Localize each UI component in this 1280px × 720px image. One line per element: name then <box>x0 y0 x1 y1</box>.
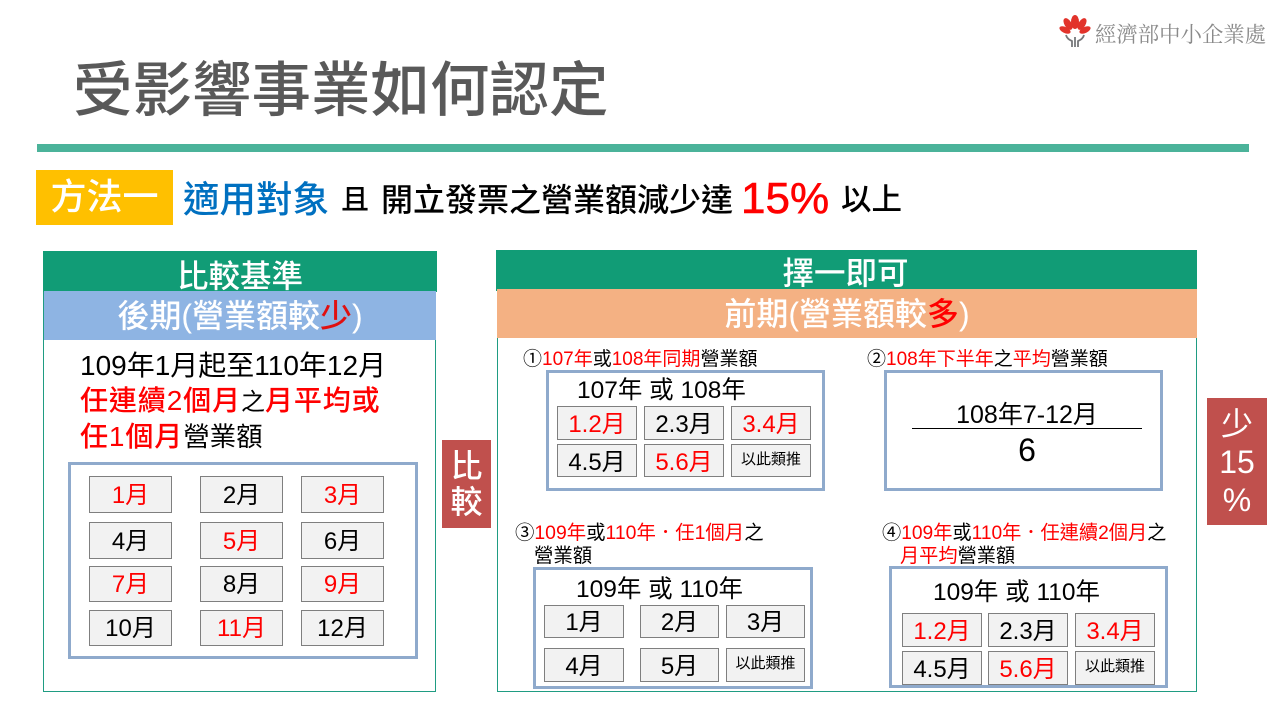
cell <box>557 444 637 477</box>
month cell: 7月: 7月 <box>112 571 149 598</box>
month cell: 1月 <box>89 476 172 513</box>
cell: 以此類推 <box>741 451 801 468</box>
title rule <box>37 144 1249 152</box>
panel header: 比較基準 <box>177 258 303 294</box>
cell <box>1075 651 1155 685</box>
cell <box>988 613 1068 647</box>
month cell: 6月 <box>301 522 384 559</box>
cell: 4.5月 <box>568 449 626 476</box>
agency name: 經濟部中小企業處 <box>1095 23 1266 47</box>
cell: 4月 <box>565 653 603 680</box>
cell <box>988 651 1068 685</box>
month cell: 11月: 11月 <box>217 615 266 642</box>
month cell: 7月 <box>89 566 172 602</box>
option 3 heading: ③109年或110年．任1個月之 <box>515 522 764 544</box>
icon: emblem <box>1059 15 1091 47</box>
month cell: 12月: 12月 <box>317 615 368 642</box>
less 15% label: 15 <box>1219 444 1255 480</box>
cell: 5.6月 <box>999 656 1057 683</box>
month cell: 3月: 3月 <box>324 482 361 509</box>
month cell: 10月 <box>89 610 172 646</box>
month cell: 10月: 10月 <box>105 615 156 642</box>
cell: 5.6月 <box>655 449 713 476</box>
option 1 box <box>546 370 825 491</box>
compare label: 較 <box>450 484 482 520</box>
compare label <box>442 440 491 528</box>
sales decline phrase: 開立發票之營業額減少達 <box>381 182 733 218</box>
description text: 任1個月營業額 <box>80 421 263 452</box>
month cell: 4月 <box>89 522 172 559</box>
month grid box <box>68 462 418 659</box>
title: 受影響事業如何認定 <box>73 57 608 124</box>
cell: 1月 <box>565 609 603 636</box>
method description <box>183 174 902 223</box>
fraction denominator: 6 <box>1018 432 1036 468</box>
logo: agency emblem and name <box>1059 15 1266 47</box>
cell: 3月 <box>747 609 784 636</box>
description text: 109年1月起至110年12月 <box>80 350 386 381</box>
month cell: 5月: 5月 <box>223 528 260 555</box>
cell: 2月 <box>661 609 698 636</box>
cell: 4.5月 <box>913 656 971 683</box>
subheader: later period <box>44 291 436 340</box>
cell <box>557 406 637 440</box>
cell: 2.3月 <box>655 411 713 438</box>
panel header <box>43 251 437 292</box>
month cell: 2月: 2月 <box>223 482 260 509</box>
option 3 heading: 營業額 <box>534 545 592 567</box>
option 4 heading: 月平均營業額 <box>900 546 1015 567</box>
option 1 years: 107年 或 108年 <box>577 377 746 404</box>
subheader: earlier period <box>497 289 1197 338</box>
less 15% label <box>1207 398 1267 525</box>
less 15% label: 少 <box>1221 406 1253 442</box>
compare label: 比 <box>450 448 482 484</box>
cell <box>544 605 624 638</box>
fraction line <box>912 428 1142 429</box>
month cell: 9月: 9月 <box>324 571 361 598</box>
applicable target: 適用對象 <box>183 179 329 220</box>
panel header <box>496 250 1197 291</box>
cell: 3.4月 <box>742 411 800 438</box>
subheader: earlier period: 前期(營業額較多) <box>724 296 970 332</box>
cell <box>640 605 719 638</box>
cell <box>644 444 724 477</box>
or more: 以上 <box>841 183 902 217</box>
month cell: 9月 <box>301 566 384 602</box>
cell: 1.2月 <box>568 411 626 438</box>
cell <box>726 648 805 682</box>
cell: 以此類推 <box>1085 658 1145 675</box>
method label: 方法一 <box>50 176 158 217</box>
cell: 5月 <box>661 653 698 680</box>
cell: 3.4月 <box>1086 618 1144 645</box>
cell <box>731 444 811 477</box>
option 3 heading <box>515 522 764 567</box>
method label <box>36 170 173 225</box>
cell <box>1075 613 1155 647</box>
conjunction: 且 <box>341 184 369 215</box>
threshold: 15% <box>741 174 829 223</box>
cell <box>731 406 811 440</box>
month cell: 11月 <box>200 610 283 646</box>
cell <box>544 648 624 682</box>
cell: 1.2月 <box>913 618 971 645</box>
option 1 heading: ①107年或108年同期營業額 <box>523 349 757 370</box>
month cell: 8月: 8月 <box>223 571 260 598</box>
month cell: 3月 <box>301 476 384 513</box>
month cell: 1月: 1月 <box>112 482 149 509</box>
description text: 任連續2個月之月平均或 <box>80 384 381 416</box>
subheader: later period: 後期(營業額較少) <box>117 298 363 334</box>
month cell: 8月 <box>200 566 283 602</box>
month cell: 12月 <box>301 610 384 646</box>
cell: 2.3月 <box>999 618 1057 645</box>
cell <box>902 651 982 685</box>
month cell: 2月 <box>200 476 283 513</box>
description text <box>80 350 386 452</box>
cell <box>640 648 719 682</box>
cell <box>726 605 805 638</box>
cell <box>644 406 724 440</box>
option 4 heading <box>882 522 1166 567</box>
panel header: 擇一即可 <box>782 255 908 291</box>
option 2 box <box>884 370 1163 491</box>
panel: comparison basis <box>43 251 436 692</box>
option 4 box <box>889 566 1168 688</box>
month cell: 4月: 4月 <box>112 528 149 555</box>
cell <box>902 613 982 647</box>
month cell: 6月: 6月 <box>324 528 361 555</box>
option 3 box <box>533 567 813 689</box>
option 3 years: 109年 或 110年 <box>576 576 743 603</box>
option 2 heading: ②108年下半年之平均營業額 <box>867 349 1108 370</box>
option 4 heading: ④109年或110年．任連續2個月之 <box>882 523 1166 544</box>
panel: choose one <box>497 250 1197 692</box>
option 4 years: 109年 或 110年 <box>933 579 1100 606</box>
fraction numerator: 108年7-12月 <box>956 401 1098 429</box>
month cell: 5月 <box>200 522 283 559</box>
cell: 以此類推 <box>735 655 796 672</box>
less 15% label: % <box>1223 482 1251 518</box>
